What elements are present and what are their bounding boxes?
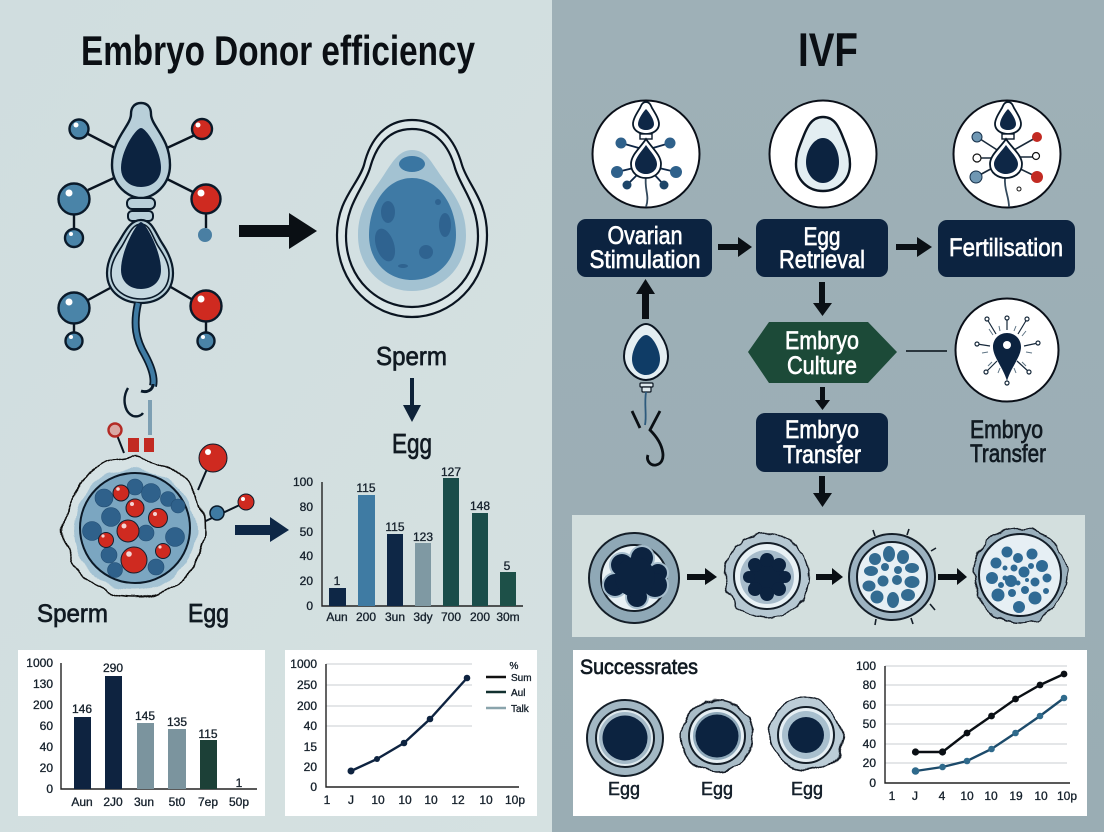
- box: Embryo Culture: Embryo: [785, 327, 859, 355]
- line chart: success rates: 40: [863, 737, 876, 751]
- connector: culture to transfer icon: [906, 350, 947, 352]
- box: Fertilisation: [938, 220, 1075, 277]
- panel: embryo development stages: [572, 515, 1085, 637]
- icon: sperm molecule: [58, 103, 222, 416]
- panel: bottom left bar chart: Aun: [71, 795, 93, 809]
- box: Embryo Culture: Culture: [787, 352, 857, 380]
- bar chart: middle left: 30m: [496, 610, 520, 624]
- arrow: sperm to egg: [239, 213, 317, 249]
- label: Sperm: Sperm: [376, 341, 447, 371]
- label: Egg two: Egg: [701, 779, 733, 799]
- line chart: success rates: 10p: [1057, 789, 1077, 803]
- line chart: success rates: J: [912, 789, 918, 803]
- bar chart: middle left: 115: [385, 520, 405, 534]
- icon: ovarian stimulation circle: [592, 100, 700, 208]
- arrow: sperm down to egg: [403, 378, 421, 422]
- line chart: success rates: 20: [863, 756, 876, 770]
- legend: Aul: [511, 688, 525, 699]
- icon: egg two: [681, 700, 753, 772]
- title: Embryo Donor efficiency: Embryo Donor efficiency: [81, 27, 476, 74]
- bar chart: middle left: 0: [306, 599, 313, 613]
- box: Egg Retrieval: Egg: [804, 223, 840, 251]
- icon: egg retrieval circle: [770, 100, 876, 208]
- icon: large egg: [337, 120, 487, 317]
- panel: IVF background: [552, 0, 1104, 832]
- legend: Talk: [511, 704, 530, 715]
- line chart: success rates: 0: [869, 776, 876, 790]
- line chart: success rates: 10: [1034, 789, 1048, 803]
- arrow: transfer to development panel: [813, 476, 832, 507]
- bar chart: middle left: 127: [441, 465, 461, 479]
- panel: embryo donor efficiency background: [0, 0, 552, 832]
- box: Embryo Culture: [748, 322, 897, 383]
- arrow: stimulation to retrieval: [718, 237, 752, 257]
- bar chart: middle left: [293, 465, 523, 624]
- label: Embryo Transfer: [970, 416, 1046, 468]
- icon: egg three: [770, 699, 842, 771]
- panel: bottom left line chart: 200: [297, 699, 317, 713]
- bar chart: middle left: 20: [300, 574, 313, 588]
- panel: bottom left bar chart: 50p: [229, 795, 249, 809]
- label: Sperm under cell: Sperm: [37, 600, 108, 628]
- panel: bottom left bar chart: 1: [236, 776, 243, 790]
- panel: bottom left line chart: 12: [451, 793, 465, 807]
- panel: bottom left line chart: 0: [310, 780, 317, 794]
- icon: stage three embryo: [849, 529, 936, 625]
- line chart: success rates: 1: [889, 789, 896, 803]
- panel: bottom left bar chart: 0: [46, 782, 53, 796]
- line chart: success rates: 60: [863, 698, 876, 712]
- box: Egg Retrieval: Retrieval: [779, 246, 865, 274]
- box: Ovarian Stimulation: [577, 219, 712, 277]
- panel: bottom left bar chart: 135: [167, 715, 187, 729]
- panel: bottom left bar chart: 146: [72, 702, 92, 716]
- arrow: stage two to three: [816, 568, 843, 585]
- bar chart: middle left: 115: [356, 481, 376, 495]
- box: Embryo Transfer: Embryo: [785, 416, 859, 444]
- label: Egg three: Egg: [791, 779, 823, 799]
- label: Embryo Transfer: Transfer: [970, 440, 1046, 468]
- legend: %: [510, 661, 519, 672]
- line chart: success rates: [856, 659, 1077, 803]
- panel: bottom left line chart: 10: [424, 793, 438, 807]
- bar chart: middle left: 200: [470, 610, 490, 624]
- box: Ovarian Stimulation: Ovarian: [608, 222, 682, 250]
- arrow: retrieval to embryo culture: [813, 282, 832, 316]
- icon: embryo transfer pin: [956, 298, 1058, 402]
- panel: success rates: [573, 650, 1087, 816]
- panel: bottom left line chart: 10p: [505, 793, 525, 807]
- panel: bottom left bar chart: 3un: [134, 795, 154, 809]
- panel: bottom left bar chart: 290: [103, 661, 123, 675]
- panel: bottom left line chart: 1000: [290, 657, 317, 671]
- icon: single sperm: [624, 324, 668, 465]
- panel: bottom left bar chart: 115: [198, 727, 218, 741]
- bar chart: middle left: 5: [504, 559, 511, 573]
- label: Egg one: Egg: [608, 779, 640, 799]
- panel: bottom left line chart: 250: [297, 678, 317, 692]
- bar chart: middle left: 700: [441, 610, 461, 624]
- bar chart: middle left: Aun: [326, 610, 348, 624]
- panel: bottom left bar chart: 130: [33, 677, 53, 691]
- line chart: success rates: 100: [856, 659, 876, 673]
- line chart: success rates: 80: [863, 678, 876, 692]
- heading: Successrates: Successrates: [580, 656, 698, 679]
- bar chart: middle left: 40: [300, 549, 313, 563]
- panel: bottom left line chart: 40: [304, 719, 317, 733]
- line chart: success rates: 10: [984, 789, 998, 803]
- box: Embryo Transfer: [756, 413, 888, 472]
- arrow: culture to transfer: [815, 387, 830, 410]
- bar chart: middle left: 1: [334, 574, 341, 588]
- box: Embryo Transfer: Transfer: [783, 441, 861, 469]
- panel: bottom left line chart: 1: [324, 793, 331, 807]
- icon: fertilisation circle: [954, 100, 1060, 208]
- bar chart: middle left: 200: [356, 610, 376, 624]
- icon: stage one embryo: [589, 533, 679, 623]
- icon: cell with nuclei: [64, 400, 254, 598]
- arrow: stage three to four: [938, 568, 967, 585]
- line chart: success rates: 10: [960, 789, 974, 803]
- bar chart: middle left: 148: [470, 499, 490, 513]
- panel: bottom left line chart: 20: [304, 760, 317, 774]
- panel: bottom left line chart: [285, 650, 537, 816]
- label: Egg under cell: Egg: [188, 598, 229, 628]
- bar chart: middle left: 3un: [385, 610, 405, 624]
- panel: bottom left bar chart: 145: [135, 709, 155, 723]
- bar chart: middle left: 3dy: [413, 610, 433, 624]
- panel: bottom left bar chart: [18, 650, 265, 816]
- box: Egg Retrieval: [756, 219, 888, 277]
- panel: bottom left bar chart: 1000: [26, 656, 53, 670]
- icon: egg one: [587, 700, 663, 776]
- icon: stage two embryo: [725, 534, 809, 618]
- panel: bottom left line chart: J: [348, 793, 354, 807]
- line chart: success rates: 4: [939, 789, 946, 803]
- panel: bottom left line chart: 10: [398, 793, 412, 807]
- arrow: retrieval to fertilisation: [896, 237, 932, 257]
- panel: bottom left line chart: 10: [479, 793, 493, 807]
- bar chart: middle left: 50: [300, 525, 313, 539]
- panel: bottom left bar chart: 5t0: [169, 795, 186, 809]
- label: Embryo Transfer: Embryo: [970, 416, 1043, 444]
- panel: bottom left bar chart: 2J0: [103, 795, 123, 809]
- panel: bottom left line chart: 10: [371, 793, 385, 807]
- panel: bottom left line chart: 15: [304, 740, 317, 754]
- icon: stage four embryo: [973, 528, 1067, 622]
- arrow: up to ovarian stimulation: [636, 279, 655, 319]
- title: IVF: IVF: [798, 23, 858, 76]
- box: Ovarian Stimulation: Stimulation: [590, 246, 700, 274]
- bar chart: middle left: 123: [413, 530, 433, 544]
- arrow: cell to bar chart: [235, 517, 289, 542]
- panel: bottom left bar chart: 7ep: [198, 795, 218, 809]
- bar chart: middle left: 80: [300, 500, 313, 514]
- panel: bottom left bar chart: 200: [33, 698, 53, 712]
- line chart: success rates: 19: [1009, 789, 1023, 803]
- panel: bottom left bar chart: 60: [40, 719, 53, 733]
- bar chart: middle left: 100: [293, 475, 313, 489]
- label: Egg: Egg: [392, 428, 432, 459]
- legend: Sum: [511, 673, 532, 684]
- legend: [486, 661, 532, 715]
- box: Fertilisation: Fertilisation: [949, 234, 1063, 262]
- panel: bottom left bar chart: 40: [40, 740, 53, 754]
- panel: bottom left bar chart: 20: [40, 761, 53, 775]
- line chart: success rates: 50: [863, 717, 876, 731]
- arrow: stage one to two: [687, 568, 717, 585]
